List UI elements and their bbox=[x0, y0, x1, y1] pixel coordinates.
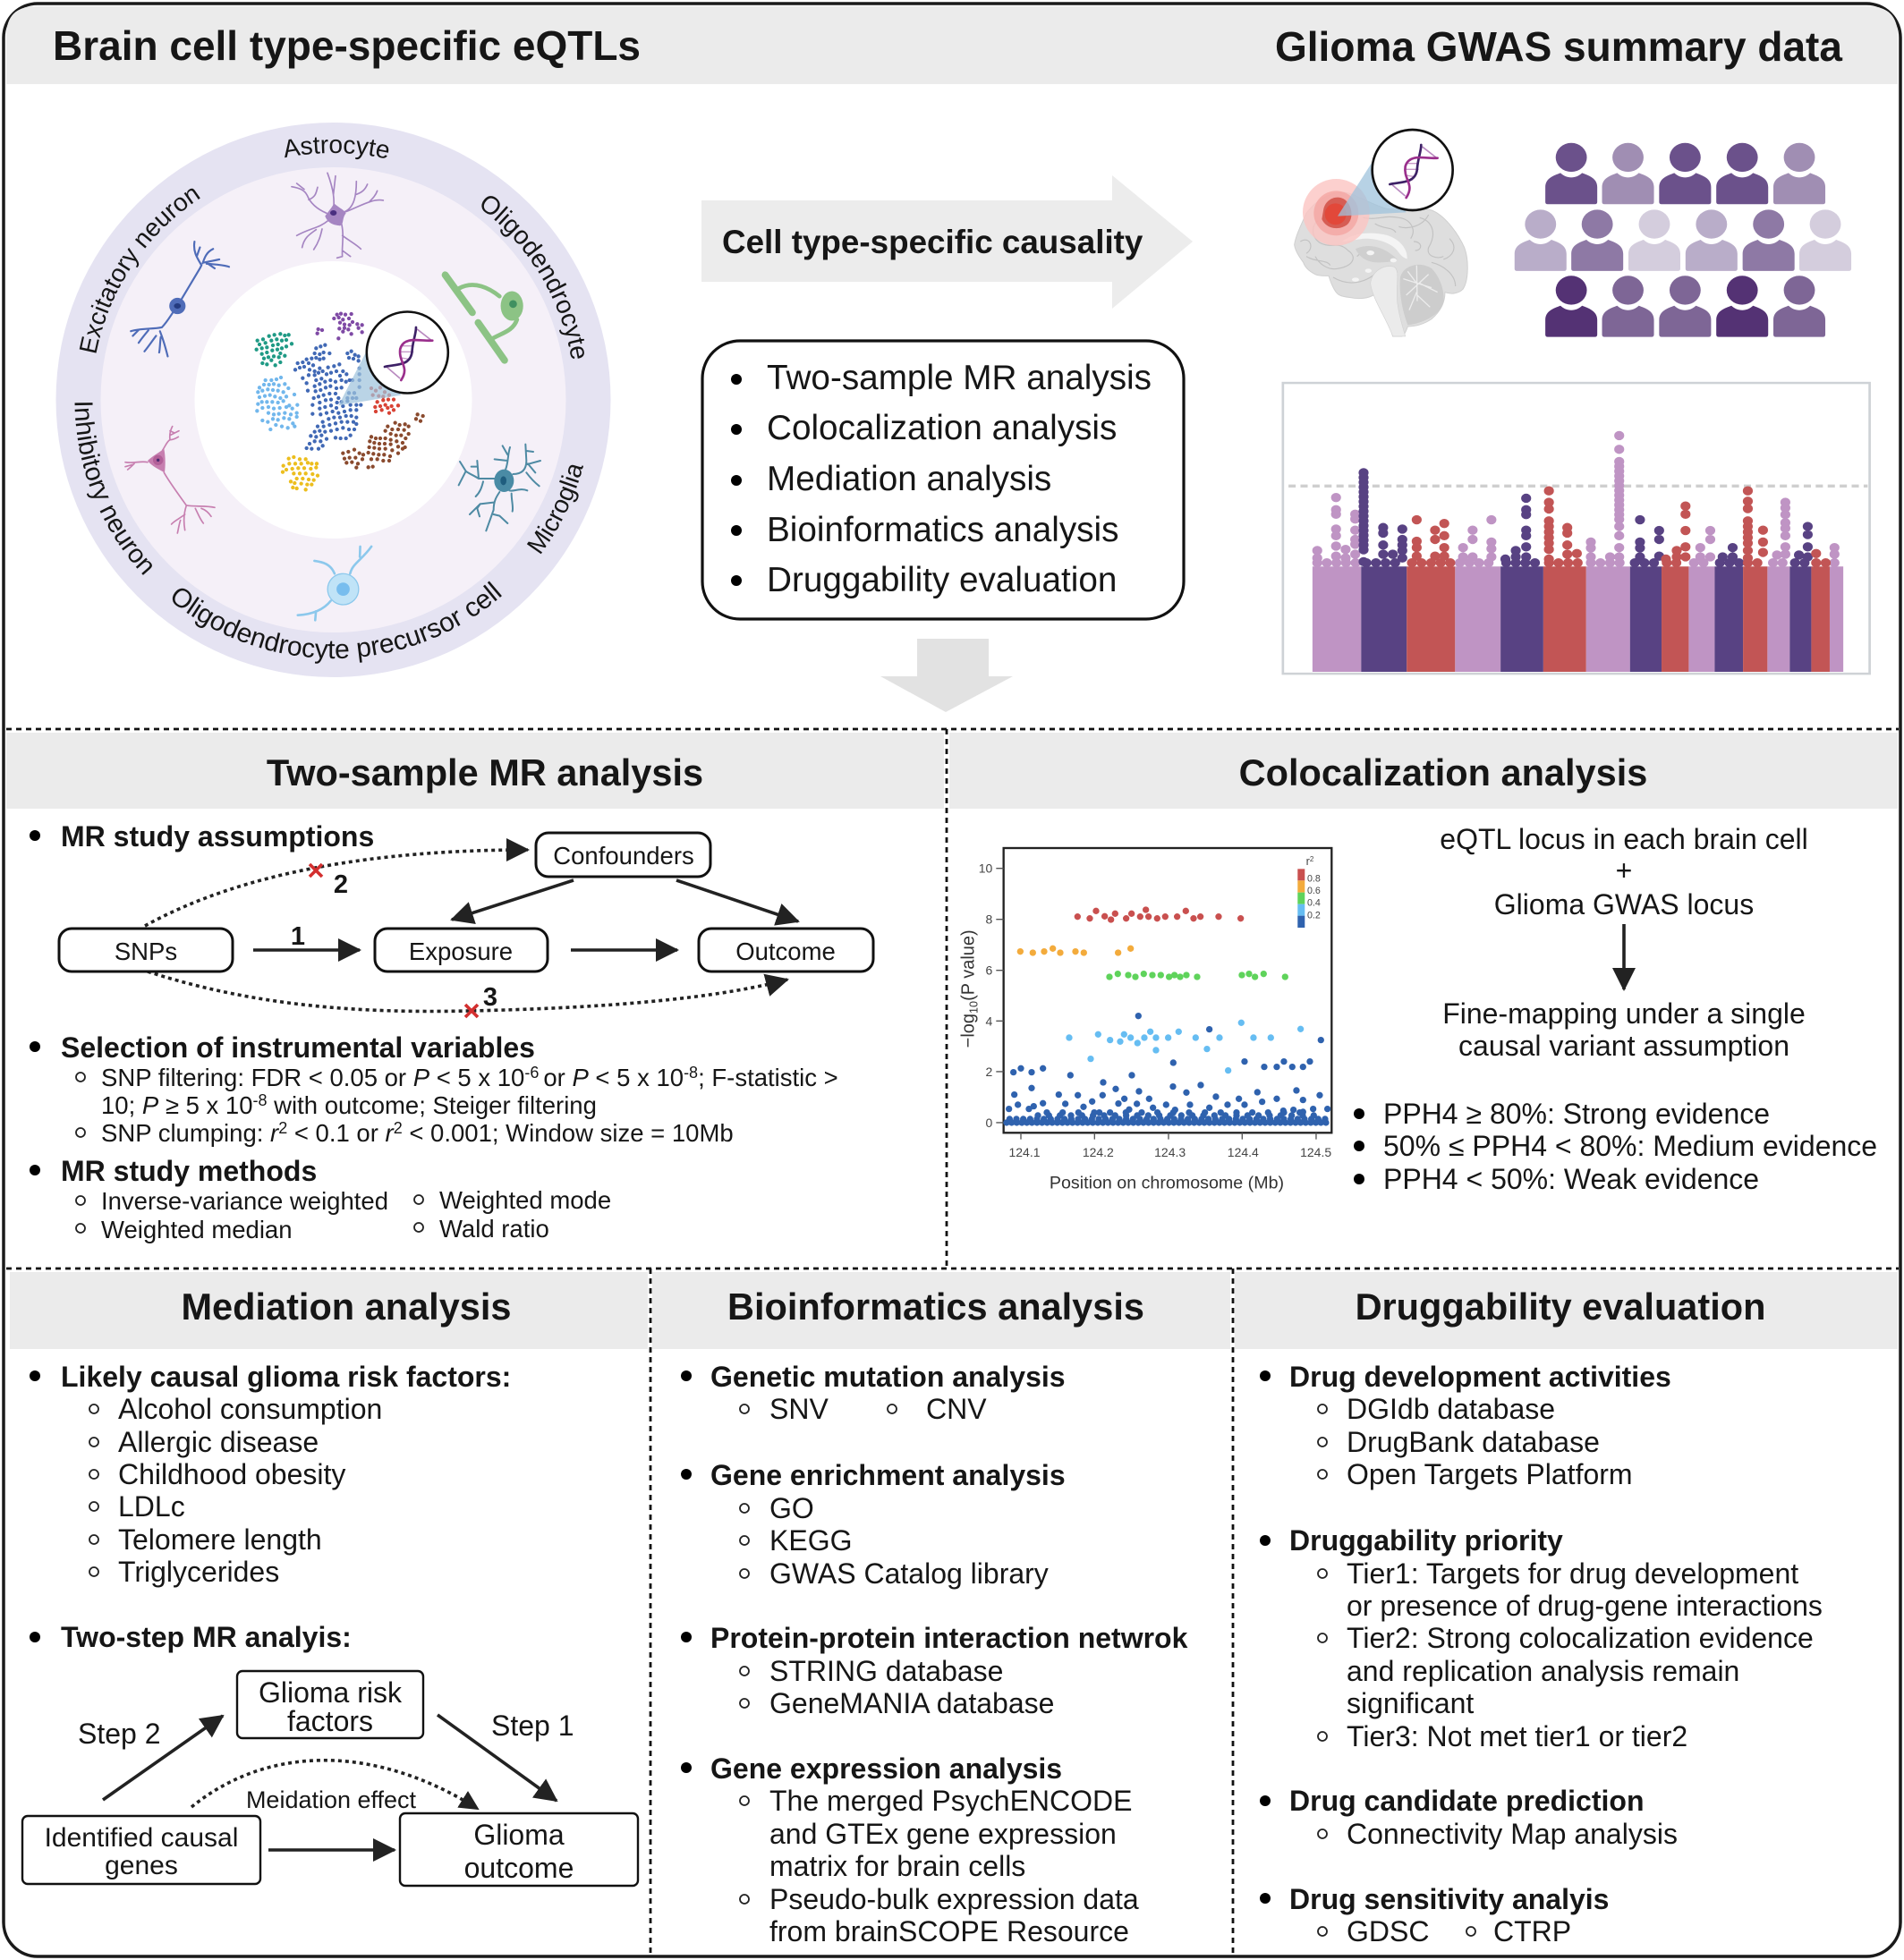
list: drug development activities: DrugBank database bbox=[1347, 1426, 1600, 1458]
list: genetic mutation analysis: SNV bbox=[769, 1393, 829, 1425]
list: drug development activities bbox=[1260, 1361, 1671, 1490]
y axis numbers bbox=[979, 861, 993, 1130]
box: SNPs: SNPs bbox=[115, 938, 177, 965]
legend: r squared: 0.8 bbox=[1307, 873, 1321, 884]
list: drug development activities: DGIdb database bbox=[1347, 1393, 1555, 1425]
bullet list: PPH4 evidence thresholds: PPH4 ≥ 80%: Strong evidence bbox=[1383, 1098, 1770, 1130]
icon: oligodendrocyte bbox=[446, 275, 523, 361]
legend: r squared: r bbox=[1306, 855, 1310, 868]
list: gene expression analysis: Gene expression analysis bbox=[710, 1752, 1062, 1785]
list: protein-protein interaction network bbox=[681, 1622, 1188, 1719]
box: Glioma outcome: Glioma bbox=[473, 1819, 565, 1851]
y axis numbers: 6 bbox=[986, 963, 993, 978]
arrow: confounders to outcome bbox=[676, 880, 798, 921]
list: genetic mutation analysis: Genetic mutation analysis bbox=[710, 1361, 1066, 1393]
ring label: Excitatory neuron: Excitatory neuron bbox=[79, 188, 200, 353]
bullet: MR study methods: Wald ratio bbox=[439, 1215, 549, 1243]
box: Exposure: Exposure bbox=[409, 938, 513, 965]
y axis numbers: 10 bbox=[979, 861, 993, 876]
arrow: step 1 bbox=[438, 1715, 557, 1801]
legend: r squared: 0.2 bbox=[1307, 910, 1321, 921]
label: Step 2: Step 2 bbox=[78, 1718, 161, 1750]
bullet list: PPH4 evidence thresholds: 50% ≤ PPH4 < 80%: Medium evidence bbox=[1383, 1130, 1877, 1162]
panel: two-sample MR analysis bbox=[6, 733, 944, 1243]
list: druggability priority: significant bbox=[1347, 1687, 1474, 1719]
bullet: Selection of instrumental variables: SNP clumping: r bbox=[101, 1119, 278, 1147]
list: gene expression analysis bbox=[681, 1752, 1139, 1947]
arrow: direct effect bbox=[268, 1848, 395, 1852]
bullet: MR study methods: Inverse-variance weighted bbox=[101, 1187, 388, 1215]
arrow: SNPs to exposure bbox=[253, 948, 360, 952]
box: Glioma outcome bbox=[400, 1813, 638, 1886]
bullet: Selection of instrumental variables: SNP filtering: FDR < 0.05 or P < 5 x 10 bbox=[101, 1064, 524, 1091]
x axis label: Position on chromosome (Mb) bbox=[1050, 1174, 1284, 1193]
ring label: Inhibitory neuron: Inhibitory neuron bbox=[75, 403, 152, 575]
list box: analyses: Druggability evaluation bbox=[767, 561, 1117, 599]
dashed arrow: SNPs to outcome bbox=[148, 972, 787, 1012]
chart: Manhattan plot bbox=[1283, 383, 1870, 674]
list: drug sensitivity analysis: GDSC bbox=[1347, 1915, 1429, 1947]
list: likely causal glioma risk factors: Triglycerides bbox=[118, 1556, 279, 1588]
box: Identified causal genes bbox=[22, 1816, 260, 1884]
list: druggability priority: or presence of drug-gene interactions bbox=[1347, 1590, 1823, 1622]
x axis numbers: 124.3 bbox=[1154, 1145, 1186, 1159]
bars light purple, dark purple, red bbox=[1313, 566, 1843, 672]
bullet: Selection of instrumental variables: ; F-statistic > bbox=[698, 1064, 838, 1091]
list: gene enrichment analysis: GWAS Catalog library bbox=[769, 1557, 1049, 1590]
heading band bbox=[6, 733, 944, 809]
icon: brain with tumour bbox=[1295, 130, 1467, 336]
ring label: Astrocyte: Astrocyte bbox=[285, 138, 388, 159]
text block: fine-mapping flow bbox=[1440, 823, 1808, 1062]
list: protein-protein interaction network: STRING database bbox=[769, 1655, 1003, 1687]
heading: Druggability evaluation: Druggability evaluation bbox=[1356, 1285, 1765, 1328]
list: likely causal glioma risk factors: Allergic disease bbox=[118, 1426, 319, 1458]
bullet: MR study methods: Weighted mode bbox=[439, 1186, 611, 1214]
list: druggability priority: and replication analysis remain bbox=[1347, 1655, 1739, 1687]
y axis ticks bbox=[996, 869, 1316, 1140]
bullet: Selection of instrumental variables: -8 bbox=[253, 1091, 268, 1109]
bullet: Selection of instrumental variables: 2 bbox=[278, 1119, 287, 1137]
text block: fine-mapping flow: + bbox=[1616, 854, 1632, 887]
icon: red cross 2 bbox=[310, 864, 322, 877]
heading band bbox=[6, 6, 1898, 84]
legend: r squared: 2 bbox=[1310, 855, 1314, 863]
list: druggability priority: Druggability priority bbox=[1289, 1524, 1563, 1557]
icon: DNA magnifier bbox=[367, 311, 448, 394]
panel: bioinformatics analysis bbox=[652, 1272, 1230, 1947]
panel: colocalization analysis bbox=[949, 733, 1898, 1195]
list: drug sensitivity analysis bbox=[1260, 1883, 1609, 1947]
y axis numbers: 2 bbox=[986, 1065, 993, 1079]
bullet: Selection of instrumental variables: -8 bbox=[684, 1064, 698, 1082]
heading band bbox=[1235, 1272, 1898, 1349]
bullet list: PPH4 evidence thresholds: PPH4 < 50%: Weak evidence bbox=[1383, 1163, 1759, 1195]
arrow: cell type-specific causality bbox=[701, 175, 1193, 309]
x axis numbers bbox=[1008, 1145, 1331, 1159]
box: Exposure bbox=[375, 929, 548, 972]
list box: analyses: Two-sample MR analysis bbox=[767, 359, 1152, 397]
chart: single-cell cluster scatter bbox=[257, 314, 423, 489]
heading band bbox=[949, 733, 1898, 809]
bullet list: PPH4 evidence thresholds bbox=[1354, 1098, 1877, 1195]
bullet: Selection of instrumental variables: r bbox=[386, 1119, 395, 1147]
heading: brain cell eQTLs: Brain cell type-specific eQTLs bbox=[53, 22, 641, 69]
box: Glioma risk factors: factors bbox=[287, 1705, 373, 1737]
significance threshold bbox=[1288, 482, 1867, 489]
box: Identified causal genes: Identified causal bbox=[45, 1823, 238, 1853]
list: gene enrichment analysis bbox=[681, 1459, 1066, 1590]
bullet: Selection of instrumental variables: < 0.1 or bbox=[287, 1119, 386, 1147]
bullet: Selection of instrumental variables: 2 bbox=[394, 1119, 403, 1137]
bullet: MR study methods bbox=[30, 1155, 611, 1243]
heading: Two-sample MR analysis: Two-sample MR analysis bbox=[267, 751, 703, 793]
y axis label: 10 bbox=[967, 1001, 980, 1014]
panel: druggability evaluation bbox=[1235, 1272, 1898, 1947]
heading: Colocalization analysis: Colocalization analysis bbox=[1239, 751, 1647, 793]
bullet: Selection of instrumental variables: or bbox=[543, 1064, 572, 1091]
list: gene expression analysis: matrix for brain cells bbox=[769, 1850, 1025, 1882]
bullet: Selection of instrumental variables: P < 5 x 10 bbox=[572, 1064, 684, 1091]
dashed arrow: mediation effect bbox=[191, 1761, 478, 1809]
list: genetic mutation analysis bbox=[681, 1361, 1066, 1425]
list: likely causal glioma risk factors: LDLc bbox=[118, 1490, 185, 1523]
arrow: step 2 bbox=[103, 1716, 223, 1800]
list: druggability priority: Tier3: Not met tier1 or tier2 bbox=[1347, 1720, 1687, 1752]
list: likely causal glioma risk factors: Childhood obesity bbox=[118, 1458, 345, 1490]
list: druggability priority: Tier1: Targets for drug development bbox=[1347, 1557, 1798, 1590]
y axis label: (P value) bbox=[958, 929, 978, 1001]
icon: red cross 3 bbox=[465, 1005, 478, 1017]
bullet: MR study assumptions: MR study assumptions bbox=[61, 820, 374, 853]
ring diagram: brain cell types bbox=[55, 123, 610, 677]
box: Confounders: Confounders bbox=[553, 842, 694, 870]
SNP dots bbox=[1317, 436, 1840, 563]
legend: r squared bbox=[1297, 855, 1321, 928]
list: druggability priority bbox=[1260, 1524, 1823, 1752]
icon: excitatory neuron bbox=[131, 242, 229, 356]
box: Outcome bbox=[699, 929, 873, 972]
y axis numbers: 0 bbox=[986, 1116, 993, 1130]
list: likely causal glioma risk factors: Likely causal glioma risk factors: bbox=[61, 1361, 511, 1393]
legend: r squared: 0.6 bbox=[1307, 886, 1321, 896]
list: drug development activities: Drug development activities bbox=[1289, 1361, 1671, 1393]
icon: oligodendrocyte precursor cell bbox=[298, 547, 371, 620]
bullet: Two-step MR analysis: Two-step MR analyis: bbox=[61, 1621, 352, 1653]
arrow: confounders to exposure bbox=[452, 880, 574, 920]
heading: Mediation analysis: Mediation analysis bbox=[181, 1285, 512, 1328]
bullet: Selection of instrumental variables: < 0.001; Window size = 10Mb bbox=[403, 1119, 734, 1147]
list: drug sensitivity analysis: Drug sensitivity analyis bbox=[1289, 1883, 1609, 1915]
list box: analyses: Bioinformatics analysis bbox=[767, 511, 1118, 549]
arrow: exposure to outcome bbox=[571, 948, 677, 952]
heading: Bioinformatics analysis: Bioinformatics analysis bbox=[727, 1285, 1144, 1328]
box: Identified causal genes: genes bbox=[105, 1851, 178, 1880]
diagram: MR assumptions bbox=[59, 833, 873, 1017]
bullet: MR study methods: MR study methods bbox=[61, 1155, 317, 1187]
bullet: Selection of instrumental variables: 10; P ≥ 5 x 10 bbox=[101, 1091, 253, 1119]
list: drug development activities: Open Targets Platform bbox=[1347, 1458, 1633, 1490]
list: gene enrichment analysis: GO bbox=[769, 1492, 814, 1524]
ring label: Oligodendrocyte precursor cell: Oligodendrocyte precursor cell bbox=[172, 581, 502, 664]
list: drug sensitivity analysis: CTRP bbox=[1493, 1915, 1571, 1947]
icon: astrocyte bbox=[292, 173, 383, 258]
list: protein-protein interaction network: GeneMANIA database bbox=[769, 1687, 1054, 1719]
label: 3: 3 bbox=[483, 983, 497, 1012]
diagram: two-step mediation bbox=[22, 1671, 638, 1886]
x axis numbers: 124.2 bbox=[1083, 1145, 1114, 1159]
list: likely causal glioma risk factors bbox=[30, 1361, 511, 1588]
list: drug candidate prediction bbox=[1260, 1785, 1678, 1850]
list: gene enrichment analysis: Gene enrichment analysis bbox=[710, 1459, 1066, 1491]
ring label: Oligodendrocyte: Oligodendrocyte bbox=[481, 196, 585, 360]
bullet: Selection of instrumental variables bbox=[30, 1031, 838, 1147]
list: genetic mutation analysis: CNV bbox=[926, 1393, 987, 1425]
heading band bbox=[10, 1272, 648, 1349]
text block: fine-mapping flow: causal variant assumption bbox=[1458, 1030, 1789, 1062]
list: gene expression analysis: The merged PsychENCODE bbox=[769, 1785, 1132, 1817]
divider lines bbox=[6, 729, 1899, 1956]
arrow: cell type-specific causality: Cell type-specific causality bbox=[722, 224, 1143, 260]
list box: analyses: Mediation analysis bbox=[767, 460, 1051, 498]
scatter points bbox=[1007, 910, 1328, 1123]
legend: r squared: 0.4 bbox=[1307, 898, 1321, 909]
text block: fine-mapping flow: Fine-mapping under a single bbox=[1442, 997, 1806, 1030]
box: SNPs bbox=[59, 929, 233, 972]
bullet: MR study methods: Weighted median bbox=[101, 1216, 293, 1243]
list: gene expression analysis: Pseudo-bulk expression data bbox=[769, 1883, 1139, 1915]
x axis numbers: 124.1 bbox=[1008, 1145, 1041, 1159]
y axis label: −log bbox=[958, 1014, 978, 1048]
callout: blue zoom triangle bbox=[338, 353, 401, 405]
label: 2: 2 bbox=[334, 870, 348, 899]
chart: locus plot bbox=[958, 848, 1331, 1193]
dashed arrow: SNPs to confounders bbox=[145, 850, 528, 926]
list: gene enrichment analysis: KEGG bbox=[769, 1524, 852, 1557]
heading: glioma GWAS: Glioma GWAS summary data bbox=[1275, 23, 1842, 70]
box: Confounders bbox=[536, 833, 710, 877]
icon: GWAS population of people bbox=[1515, 143, 1851, 337]
box: Outcome: Outcome bbox=[735, 938, 836, 965]
list: gene expression analysis: from brainSCOPE Resource bbox=[769, 1915, 1129, 1947]
bullet: Selection of instrumental variables: Selection of instrumental variables bbox=[61, 1031, 535, 1064]
panel: top overview bbox=[6, 6, 1898, 712]
y axis numbers: 8 bbox=[986, 912, 993, 927]
x axis numbers: 124.5 bbox=[1300, 1145, 1331, 1159]
list box: analyses: Colocalization analysis bbox=[767, 409, 1117, 447]
panel: mediation analysis bbox=[10, 1272, 648, 1886]
icon: inhibitory neuron bbox=[125, 427, 215, 533]
text block: fine-mapping flow: Glioma GWAS locus bbox=[1494, 888, 1754, 921]
arrow: down to fine-mapping bbox=[1622, 924, 1626, 989]
arrow: down to analyses bbox=[880, 639, 1013, 712]
label: 1: 1 bbox=[291, 922, 305, 951]
label: Meidation effect: Meidation effect bbox=[246, 1786, 417, 1813]
heading band bbox=[652, 1272, 1230, 1349]
bullet: Selection of instrumental variables: with outcome; Steiger filtering bbox=[268, 1091, 597, 1119]
list: drug candidate prediction: Drug candidate prediction bbox=[1289, 1785, 1644, 1817]
list: gene expression analysis: and GTEx gene expression bbox=[769, 1818, 1117, 1850]
list: druggability priority: Tier2: Strong colocalization evidence bbox=[1347, 1622, 1814, 1654]
icon: microglia bbox=[459, 445, 540, 530]
bullet: Selection of instrumental variables: -6 bbox=[524, 1064, 543, 1082]
box: Glioma outcome: outcome bbox=[464, 1852, 574, 1884]
list: drug candidate prediction: Connectivity Map analysis bbox=[1347, 1818, 1678, 1850]
y axis numbers: 4 bbox=[986, 1014, 993, 1028]
box: Glioma risk factors bbox=[237, 1671, 423, 1738]
list: likely causal glioma risk factors: Alcohol consumption bbox=[118, 1393, 382, 1425]
box: Glioma risk factors: Glioma risk bbox=[259, 1676, 403, 1709]
x axis numbers: 124.4 bbox=[1228, 1145, 1259, 1159]
text block: fine-mapping flow: eQTL locus in each brain cell bbox=[1440, 823, 1808, 855]
ring label: Microglia: Microglia bbox=[526, 465, 583, 555]
list: protein-protein interaction network: Protein-protein interaction netwrok bbox=[710, 1622, 1188, 1654]
label: Step 1: Step 1 bbox=[491, 1710, 574, 1742]
list box: analyses bbox=[702, 341, 1184, 619]
list: likely causal glioma risk factors: Telomere length bbox=[118, 1523, 322, 1556]
